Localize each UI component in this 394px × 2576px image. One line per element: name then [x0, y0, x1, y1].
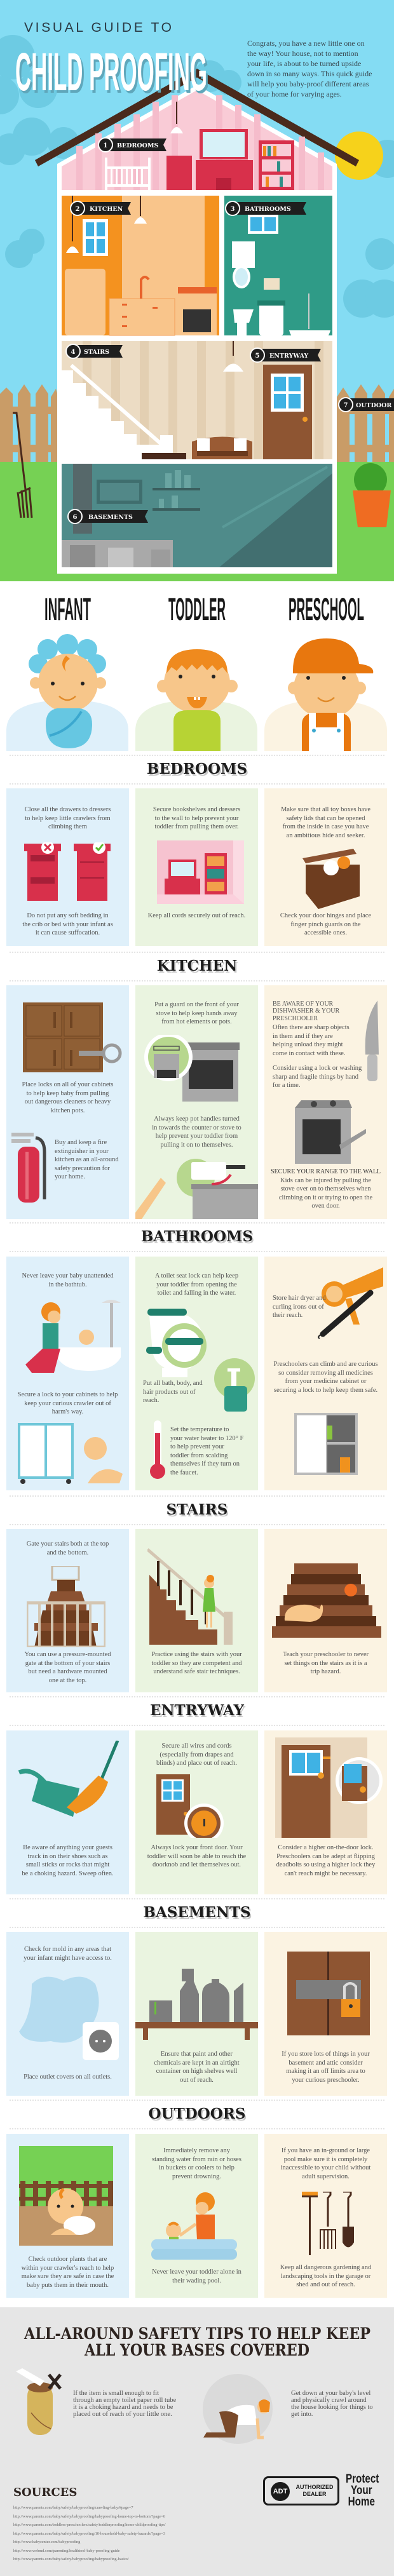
panel: kitchen preschool: DISHWASHER & YOUR	[273, 1008, 339, 1015]
panel: kitchen infant: safety precaution for	[55, 1165, 110, 1171]
panel: stairs infant: and the bottom.	[47, 1549, 88, 1556]
character: toddler	[135, 649, 257, 751]
icon: soap bottle	[214, 1358, 255, 1412]
sun	[335, 131, 383, 180]
icon: chemicals on shelf	[135, 1969, 258, 2040]
panel: kitchen preschool: stove over on to themselves when	[280, 1185, 371, 1192]
clouds	[0, 35, 394, 318]
panel: stairs toddler: Practice using the stairs with your	[151, 1651, 242, 1658]
label: bedrooms: 1	[104, 142, 107, 149]
panel: outdoors infant: Check outdoor plants that are	[29, 2256, 107, 2263]
panel: outdoors toddler	[135, 2134, 258, 2298]
icon: toilet paper roll	[17, 2368, 62, 2435]
panel: bathrooms infant: Never leave your baby unattended	[22, 1272, 114, 1279]
panel: stairs preschool: trip hazard.	[311, 1668, 341, 1675]
panel: kitchen infant: kitchen as an all-around	[55, 1156, 119, 1163]
panel: bedrooms toddler: Secure bookshelves and dressers	[153, 806, 240, 813]
text: soft bedding: the crib or bed with your infant as	[22, 921, 113, 927]
panel: basements preschool	[264, 1932, 387, 2096]
room: stairs and entryway	[62, 341, 332, 459]
icon: stairs with girl	[147, 1548, 233, 1645]
icon: medicine cabinet	[294, 1413, 358, 1475]
panel: stairs preschool: set things on the stairs as it is a	[284, 1659, 367, 1667]
panel: bathrooms toddler: to help prevent your	[170, 1443, 224, 1450]
panel: kitchen toddler: in towards the counter or stove to	[152, 1124, 241, 1131]
icon: stove with guard	[144, 1035, 240, 1102]
label: bedrooms	[98, 138, 166, 152]
logo: ADT authorized dealer: ADT	[273, 2488, 287, 2495]
panel: basements preschool: If you store lots of things in your	[282, 2051, 370, 2058]
panel: bedrooms preschool: Check your door hinges and place	[280, 912, 371, 919]
panel: kitchen toddler: Put a guard on the front of your	[154, 1001, 239, 1008]
icon: thermometer	[150, 1420, 165, 1479]
text: crawl around tip	[291, 2390, 373, 2418]
panel: bedrooms toddler: to the wall to help prevent your	[155, 814, 238, 822]
panel: bedrooms preschool	[264, 788, 387, 946]
panel: entryway preschool: Preschoolers can be adept at flipping	[276, 1852, 375, 1860]
room: bedrooms	[62, 90, 332, 191]
icon: door with knob	[156, 1774, 224, 1838]
panel: basements preschool: your curious preschooler.	[292, 2076, 360, 2084]
text: source urls: http://www.parents.com/baby/safety/babyproofing/babyproofing-basics/	[13, 2557, 129, 2561]
panel: entryway infant: small sticks or rocks that might	[26, 1861, 109, 1868]
intro text: Congrats, you have a new little one on	[247, 39, 365, 48]
icon: hair dryer and curling iron	[318, 1267, 383, 1339]
text: close drawers	[25, 806, 111, 830]
label: outdoor	[339, 398, 394, 412]
panel: outdoors toddler: their wading pool.	[172, 2277, 221, 2284]
panel: outdoors infant: make sure they are safe in case the	[22, 2273, 114, 2280]
panel: kitchen toddler: from hot elements or pots.	[161, 1018, 232, 1025]
label: bathrooms: 3	[231, 206, 235, 213]
panel: outdoors preschool: adult supervision.	[302, 2173, 350, 2180]
room: bathrooms	[224, 196, 332, 346]
panel: entryway infant	[6, 1730, 129, 1894]
panel: kitchen preschool: sharp and fragile things by hand	[273, 1074, 358, 1080]
panel: bathrooms toddler: toilet and falling in the water.	[158, 1290, 236, 1297]
text: soft bedding	[22, 912, 113, 936]
fences	[0, 384, 394, 462]
panel: kitchen infant: kitchen pots.	[51, 1107, 85, 1114]
panel: bathrooms toddler: your toddler from opening the	[156, 1281, 237, 1288]
heading: sources: SOURCES	[13, 2486, 77, 2499]
text: soft bedding: it can cause suffocation.	[36, 929, 100, 936]
label: bedrooms: BEDROOMS	[117, 142, 158, 149]
logo: ADT authorized dealer	[263, 2476, 339, 2505]
panel: outdoors preschool: If you have an in-ground or large	[282, 2147, 370, 2154]
icon: toilet with lock	[146, 1309, 207, 1377]
icon: pot and hand	[135, 1159, 258, 1219]
panel: stairs infant: gate at the bottom of your stairs	[25, 1659, 110, 1667]
panel: bathrooms infant: harm's way.	[52, 1408, 83, 1415]
roof	[35, 69, 359, 166]
room: basements	[62, 464, 332, 567]
panel: entryway toddler: toddler will soon be able to reach the	[147, 1852, 246, 1860]
panel: stairs infant: but need a hardware mounted	[28, 1668, 107, 1675]
intro text: down in so many ways. This quick guide	[247, 69, 372, 78]
icon: potted plant	[353, 463, 391, 527]
panel: kitchen preschool: helping unload they might	[273, 1041, 343, 1048]
heading: bedrooms: BEDROOMS	[147, 760, 247, 778]
text: protect your home: Your	[351, 2484, 372, 2497]
panel: kitchen preschool: Kids can be injured by pulling the	[280, 1177, 371, 1184]
section: all-around safety tips	[0, 2307, 394, 2576]
panel: bathrooms toddler: A toilet seat lock can help keep	[155, 1272, 238, 1279]
panel: kitchen toddler: help prevent your toddler from	[156, 1133, 238, 1140]
icon: dressers	[24, 842, 111, 901]
panel: basements infant	[6, 1932, 129, 2096]
panel: kitchen toddler	[135, 985, 258, 1219]
panel: bathrooms infant	[6, 1257, 129, 1490]
panel: stairs toddler	[135, 1529, 258, 1692]
icon: gated stairs	[27, 1566, 105, 1647]
panel: bedrooms preschool: Make sure that all toy boxes have	[281, 806, 370, 813]
intro text: will help you baby-proof different areas	[247, 79, 369, 88]
panel: kitchen infant: to help keep baby from pulling	[27, 1090, 109, 1096]
icon: garden tools	[302, 2192, 354, 2255]
panel: stairs infant: Gate your stairs both at the top	[27, 1541, 109, 1548]
icon: toy box	[302, 849, 360, 909]
logo: ADT authorized dealer: AUTHORIZED	[296, 2484, 333, 2490]
intro text	[247, 39, 372, 98]
label: kitchen: KITCHEN	[90, 206, 123, 213]
panel: stairs preschool: Teach your preschooler to never	[283, 1651, 369, 1658]
icon: cabinet with key	[23, 1002, 122, 1072]
panel: bedrooms toddler: Keep all cords securely out of reach.	[148, 912, 245, 919]
panel: entryway toddler: (especially from drapes and	[160, 1751, 234, 1758]
text: close drawers: climbing them	[48, 823, 87, 830]
label: basements	[68, 509, 148, 523]
text: protect your home	[346, 2472, 379, 2509]
panel: outdoors toddler: standing water from rain or hoses	[152, 2156, 241, 2162]
text: source urls: http://www.webmd.com/parenting/healthtool-baby-proofing-guide	[13, 2549, 119, 2552]
text: soft bedding: Do not put any soft bedding in	[27, 912, 109, 919]
text: crawl around tip: get into.	[291, 2411, 313, 2418]
panel: entryway preschool: Consider a higher on-the-door lock.	[278, 1844, 374, 1851]
heading: stairs: STAIRS	[166, 1501, 228, 1518]
panel: bathrooms toddler: toddler from scalding	[170, 1452, 228, 1459]
panel: bedrooms preschool: finger pinch guards on the	[290, 921, 361, 927]
heading: bathrooms: BATHROOMS	[141, 1228, 253, 1245]
panel: basements toddler: chemicals are kept in an airtight	[154, 2060, 240, 2066]
panel: kitchen toddler: pulling it on to themselves.	[160, 1141, 233, 1149]
panel: bathrooms preschool: their reach.	[273, 1312, 302, 1319]
panel: outdoors preschool: shed and out of reach.	[296, 2281, 355, 2288]
panel: kitchen toddler: stove to help keep hands away	[156, 1010, 238, 1016]
label: entryway: ENTRYWAY	[269, 353, 308, 360]
panel: kitchen infant: Buy and keep a fire	[55, 1139, 107, 1146]
label: outdoor: OUTDOOR	[356, 402, 391, 409]
panel: bathrooms toddler: hair products out of	[143, 1389, 196, 1395]
icon: pink room	[157, 840, 244, 904]
heading: all-around safety tips	[24, 2324, 370, 2358]
panel: bathrooms infant: Secure a lock to your cabinets to help	[18, 1391, 118, 1398]
text: source urls: http://www.parents.com/baby/safety/babyproofing/10-household-baby-safety-hazards/?page=3	[13, 2531, 165, 2536]
icon: crawling adult	[203, 2374, 273, 2444]
panel: bathrooms toddler: Set the temperature to	[170, 1426, 229, 1433]
logo: ADT authorized dealer: DEALER	[302, 2491, 327, 2497]
panel: kitchen infant: your home.	[55, 1173, 85, 1180]
panel: basements infant: your infant might have access to.	[24, 1954, 112, 1962]
panel: kitchen preschool: Often there are sharp objects	[273, 1024, 350, 1031]
panel: basements preschool: making it an off limits area to	[286, 2068, 365, 2075]
panel: kitchen infant: out dangerous cleaners or heavy	[25, 1098, 111, 1105]
icon: baby in yard	[19, 2146, 113, 2246]
panel: bedrooms infant	[6, 788, 129, 946]
text: toilet roll tip: If the item is small enough to fit	[73, 2390, 159, 2397]
panel: bathrooms preschool: Preschoolers can climb and are curious	[273, 1361, 378, 1368]
hero: house illustration	[0, 0, 394, 581]
label: basements: BASEMENTS	[88, 514, 133, 521]
panel: bedrooms toddler: toddler from pulling them over.	[154, 823, 239, 830]
panel: entryway preschool: can't reach might be necessary.	[285, 1870, 367, 1877]
panel: stairs preschool	[264, 1529, 387, 1692]
panel: bathrooms preschool: curling irons out of	[273, 1304, 324, 1310]
text: crawl around tip: Get down at your baby's level	[291, 2390, 370, 2397]
label: kitchen: 2	[76, 206, 80, 213]
label: stairs: 4	[71, 349, 76, 356]
text: close drawers: to help keep little crawlers from	[25, 814, 111, 822]
panel: stairs infant: You can use a pressure-mounted	[24, 1651, 111, 1658]
panel: kitchen preschool	[264, 985, 387, 1219]
panel: bathrooms preschool: Store hair dryer and	[273, 1295, 326, 1302]
panel: entryway toddler: Secure all wires and cords	[161, 1743, 232, 1750]
panel: bathrooms toddler: Put all bath, body, and	[143, 1380, 203, 1387]
panel: basements preschool: basement and attic consider	[289, 2060, 363, 2066]
panel: basements infant: Check for mold in any areas that	[24, 1946, 111, 1953]
panel: bathrooms infant: keep your curious crawler out of	[24, 1400, 111, 1406]
age group headers	[6, 591, 387, 751]
panel: entryway toddler	[135, 1730, 258, 1894]
room: kitchen	[62, 196, 219, 335]
icon: stairs with toy and dog	[272, 1563, 381, 1638]
label: kitchen	[71, 201, 131, 215]
panel: outdoors preschool: landscaping tools in the garage or	[281, 2273, 370, 2279]
heading: outdoors: OUTDOORS	[149, 2105, 245, 2122]
panel: basements infant: Place outlet covers on all outlets.	[24, 2074, 112, 2080]
text: toilet roll tip: through an empty toilet paper roll tube	[73, 2397, 176, 2404]
panel: outdoors preschool: pool make sure it is completely	[284, 2156, 367, 2162]
panel: entryway infant: Be aware of anything your guests	[23, 1844, 112, 1851]
panel: stairs infant: one at the top.	[49, 1677, 86, 1683]
panel: entryway toddler: doorknob and let themselves out.	[153, 1861, 241, 1868]
icon: fire extinguisher	[11, 1133, 46, 1203]
panel: kitchen toddler: Always keep pot handles turned	[154, 1116, 240, 1123]
panel: outdoors toddler: in buckets or coolers to help	[159, 2164, 234, 2171]
heading: kitchen: KITCHEN	[157, 957, 237, 974]
label: stairs	[66, 344, 123, 358]
label: bathrooms	[226, 201, 306, 215]
panel: outdoors toddler: Never leave your toddler alone in	[152, 2269, 241, 2276]
panel: kitchen preschool: in them and if they are	[273, 1033, 333, 1039]
panel: kitchen preschool: for a time.	[273, 1082, 300, 1089]
panel: bedrooms toddler	[135, 788, 258, 946]
character: preschooler	[264, 638, 387, 751]
text: protect your home: Home	[348, 2495, 375, 2509]
panel: bathrooms preschool: securing a lock to help keep them safe.	[274, 1386, 377, 1394]
panel: kitchen preschool: PRESCHOOLER	[273, 1015, 318, 1022]
panel: outdoors infant	[6, 2134, 129, 2298]
panel: kitchen preschool: SECURE YOUR RANGE TO THE WALL	[271, 1168, 381, 1175]
icon: door with high lock	[275, 1737, 383, 1838]
panel: bedrooms preschool: accessible ones.	[304, 929, 347, 936]
label: entryway: 5	[255, 353, 260, 360]
text: source urls: http://www.parents.com/toddlers-preschoolers/safety/toddlerproofing/home-childproofing-tips/	[13, 2523, 166, 2527]
panel: outdoors preschool	[264, 2134, 387, 2298]
panel: entryway infant: be a choking hazard. Sweep often.	[22, 1870, 114, 1877]
text: crawl around tip: the house looking for things to	[291, 2404, 373, 2411]
icon: locked doors	[287, 1952, 370, 2035]
panel: kitchen infant: extinguisher in your	[55, 1147, 109, 1155]
age group headers: INFANT	[44, 591, 91, 627]
icon: knife	[365, 1001, 379, 1081]
panel: outdoors infant: baby puts them in their mouth.	[27, 2282, 109, 2288]
intro text: of your home for varying ages.	[247, 90, 342, 98]
panel: bedrooms preschool: from the inside in case you have	[283, 823, 369, 830]
character: infant	[6, 634, 128, 751]
panel: kitchen preschool: climbing on it or trying to open the	[279, 1194, 372, 1201]
panel: entryway infant: track in on their shoes such as	[28, 1852, 107, 1860]
panel: entryway preschool	[264, 1730, 387, 1894]
panel: stairs infant	[6, 1529, 129, 1692]
panel: outdoors toddler: prevent drowning.	[172, 2173, 221, 2180]
panel: bedrooms preschool: safety lids that can be opened	[287, 814, 365, 822]
panel: entryway toddler: Always lock your front door. Your	[151, 1844, 243, 1851]
text: protect your home: Protect	[346, 2472, 379, 2486]
panel: bedrooms preschool: an ambitious hide and seeker.	[287, 832, 365, 839]
text: source urls: http://www.babycenter.com/babyproofing	[13, 2540, 80, 2544]
panel: basements toddler: out of reach.	[180, 2076, 214, 2084]
title: VISUAL GUIDE TO	[24, 20, 172, 35]
panel: basements toddler	[135, 1932, 258, 2096]
panel: kitchen infant: Place locks on all of your cabinets	[22, 1081, 114, 1088]
label: entryway	[250, 348, 321, 362]
panel: bathrooms toddler	[135, 1257, 258, 1490]
intro text: your life, is about to be turned upside	[247, 59, 361, 68]
text: toilet roll tip: placed out of reach of your little one.	[73, 2411, 172, 2418]
age group headers: TODDLER	[168, 591, 226, 627]
panel: bathrooms toddler: your water heater to 120° F	[170, 1434, 243, 1442]
label: basements: 6	[73, 514, 78, 521]
panel: outdoors preschool: Keep all dangerous gardening and	[280, 2264, 371, 2271]
panel: kitchen preschool: come in contact with these.	[273, 1049, 346, 1057]
text: source urls: http://www.parents.com/baby/safety/babyproofing/babyproofing-home-top-to-bottom/?page=6	[13, 2514, 165, 2518]
panel: bathrooms toddler: themselves if they turn on	[170, 1460, 240, 1467]
panel: bathrooms preschool	[264, 1257, 387, 1490]
panel: outdoors infant: within your crawler's reach to help	[22, 2264, 114, 2272]
ground	[0, 462, 394, 581]
text: toilet roll tip: it is a choking hazard and needs to be	[73, 2404, 173, 2411]
text: source urls: http://www.parents.com/baby/safety/babyproofing/crawling-baby/#page=7	[13, 2505, 133, 2510]
panel: bathrooms preschool: from your medicine cabinet or	[285, 1378, 366, 1385]
text: close drawers: Close all the drawers to dressers	[25, 806, 111, 813]
panel: stairs toddler: understand safe stair techniques.	[153, 1668, 240, 1675]
icon: mother bathing baby	[25, 1300, 121, 1373]
title	[15, 20, 209, 104]
panel: stairs toddler: toddler so they are competent and	[151, 1659, 241, 1667]
panel: kitchen infant	[6, 985, 129, 1219]
label: bathrooms: BATHROOMS	[245, 206, 291, 213]
icon: range	[295, 1100, 366, 1164]
heading: basements: BASEMENTS	[143, 1904, 251, 1921]
label: outdoor: 7	[344, 402, 348, 409]
panel: kitchen preschool: oven door.	[311, 1203, 340, 1210]
intro text: the way! Your house, not to mention	[247, 49, 358, 58]
icon: cabinet and crawler	[18, 1423, 123, 1484]
panel: kitchen preschool: Consider using a lock or washing	[273, 1065, 362, 1072]
panel: bathrooms preschool: so consider removing all medicines	[278, 1370, 373, 1376]
heading: entryway: ENTRYWAY	[150, 1702, 244, 1719]
panel: basements toddler: Ensure that paint and other	[161, 2051, 233, 2058]
icon: broom and dustpan	[18, 1741, 119, 1817]
panel: bathrooms toddler: the faucet.	[170, 1469, 198, 1476]
icon: wading pool	[151, 2192, 237, 2260]
panel: basements toddler: container on high shelves well	[156, 2068, 237, 2075]
panel: bathrooms toddler: reach.	[143, 1397, 159, 1404]
text: crawl around tip: and physically crawl around	[291, 2397, 367, 2404]
text: source urls	[13, 2505, 166, 2561]
panel: entryway toddler: blinds) and place out of reach.	[156, 1760, 237, 1767]
house body	[57, 85, 337, 574]
panel: bathrooms infant: in the bathtub.	[48, 1281, 87, 1288]
icon: pitchfork	[13, 413, 32, 518]
icon: mold and outlet	[19, 1977, 119, 2060]
text: toilet roll tip	[73, 2390, 176, 2418]
label: stairs: STAIRS	[84, 349, 109, 356]
panel: outdoors preschool: inaccessible to your child without	[281, 2164, 370, 2171]
panel: entryway preschool: deadbolts so using a higher lock they	[276, 1861, 375, 1868]
panel: outdoors toddler: Immediately remove any	[163, 2147, 230, 2154]
panel: kitchen preschool: BE AWARE OF YOUR	[273, 1001, 333, 1008]
